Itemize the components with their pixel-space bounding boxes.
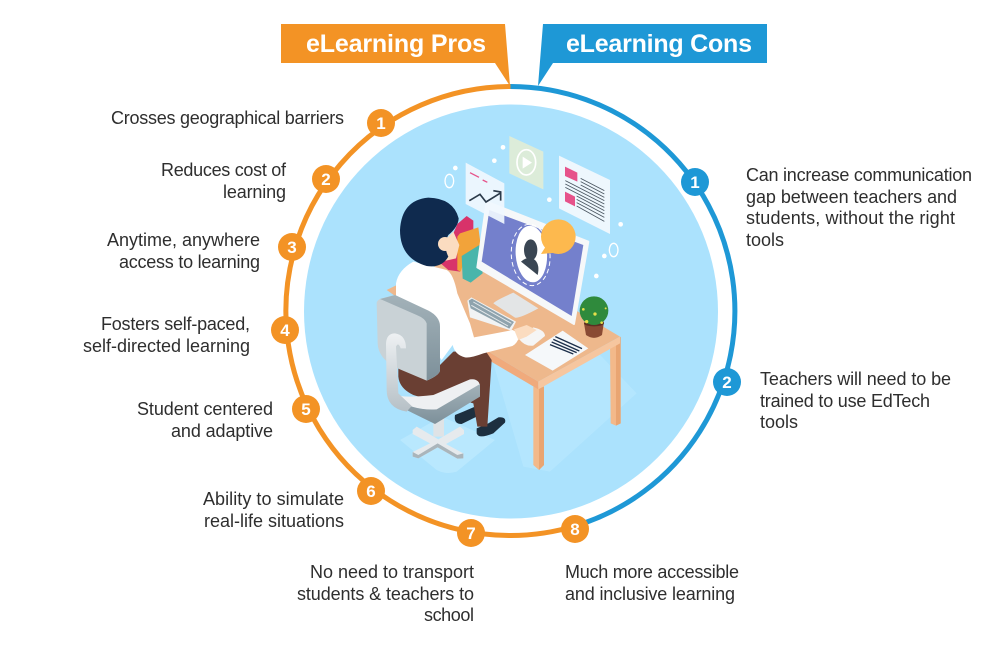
heading: eLearning Cons: eLearning Cons <box>566 30 752 58</box>
con 1: Can increase communication <box>746 165 972 185</box>
monitor stand <box>493 293 538 318</box>
pro 5 <box>137 395 320 441</box>
pro 6 <box>203 477 385 531</box>
pro 4: self-directed learning <box>83 336 250 356</box>
con 2: tools <box>760 412 798 432</box>
con 1: students, without the right <box>746 208 955 228</box>
heading: eLearning Pros <box>281 24 510 86</box>
pro 7 <box>297 519 485 625</box>
monitor <box>477 202 588 324</box>
con 2: 2 <box>722 373 732 392</box>
con 2: Teachers will need to be <box>760 369 951 389</box>
books <box>441 216 483 283</box>
pro 5: and adaptive <box>171 421 273 441</box>
pro 2 <box>161 160 340 202</box>
pro 3: Anytime, anywhere <box>107 230 260 250</box>
pro 6: 6 <box>366 482 376 501</box>
pro 1: 1 <box>376 114 386 133</box>
floating dots <box>445 145 623 278</box>
pro 3: 3 <box>287 238 297 257</box>
desk <box>387 248 621 470</box>
pro 4: 4 <box>280 321 290 340</box>
pro 2: 2 <box>321 170 331 189</box>
pro 8: and inclusive learning <box>565 584 735 604</box>
shirt <box>396 262 519 360</box>
pro 6: Ability to simulate <box>203 489 344 509</box>
pro 3 <box>107 230 306 272</box>
floating card: chart <box>466 163 504 224</box>
plant <box>580 296 608 338</box>
pro 2: learning <box>223 182 286 202</box>
con 2 <box>713 368 951 432</box>
pro 2: Reduces cost of <box>161 160 287 180</box>
con 1: 1 <box>690 173 700 192</box>
pro 4 <box>83 314 299 356</box>
floating card: document <box>559 156 610 234</box>
ring: pros (orange arc) <box>286 86 575 535</box>
trousers <box>398 350 492 427</box>
floor shadow <box>400 323 637 473</box>
keyboard <box>467 297 516 331</box>
papers <box>525 331 588 371</box>
pro 8 <box>561 515 739 604</box>
armrest <box>386 333 412 412</box>
pro 7: students & teachers to <box>297 584 474 604</box>
con 1 <box>681 165 972 250</box>
pro 3: access to learning <box>119 252 260 272</box>
pro 4: Fosters self-paced, <box>101 314 250 334</box>
illustration: person at desk <box>377 136 637 473</box>
pro 7: No need to transport <box>310 562 474 582</box>
con 1: gap between teachers and <box>746 187 957 207</box>
heading: eLearning Cons <box>538 24 767 86</box>
pro 7: school <box>424 605 474 625</box>
hand <box>514 325 537 340</box>
pro 7: 7 <box>466 524 476 543</box>
head <box>400 198 459 266</box>
ring: cons (blue arc) <box>510 86 735 526</box>
pro 8: Much more accessible <box>565 562 739 582</box>
pro 6: real-life situations <box>204 511 344 531</box>
chair back <box>377 295 440 381</box>
heading: eLearning Pros: eLearning Pros <box>306 30 486 58</box>
pro 5: Student centered <box>137 399 273 419</box>
con 1: tools <box>746 230 784 250</box>
floating card: video <box>509 136 543 189</box>
con 2: trained to use EdTech <box>760 391 930 411</box>
mouse <box>519 327 545 346</box>
shoes <box>455 407 505 436</box>
pro 1 <box>111 108 395 137</box>
background circle <box>304 104 718 518</box>
pro 8: 8 <box>570 520 580 539</box>
chair seat <box>398 379 480 424</box>
chair base <box>413 413 464 459</box>
pro 1: Crosses geographical barriers <box>111 108 344 128</box>
pro 5: 5 <box>301 400 311 419</box>
